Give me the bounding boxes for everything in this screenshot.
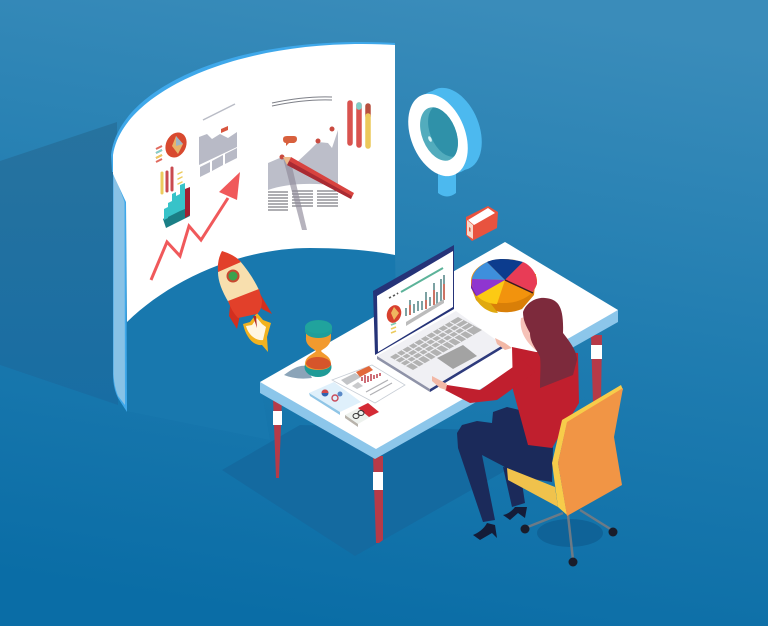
legs bbox=[457, 407, 553, 522]
back hand bbox=[495, 338, 512, 350]
tablet card bbox=[309, 382, 361, 415]
panel blue edge bbox=[111, 42, 395, 172]
panel shadow on floor bbox=[0, 122, 118, 405]
rocket collar bbox=[228, 289, 262, 318]
rocket bbox=[218, 251, 272, 352]
rocket body bbox=[218, 261, 259, 303]
desk edge bbox=[260, 310, 618, 459]
rocket window bbox=[226, 270, 240, 282]
fins bbox=[229, 306, 240, 329]
pencil bbox=[283, 157, 354, 230]
screen bars bbox=[406, 275, 444, 316]
book bbox=[466, 206, 498, 241]
desk top bbox=[260, 242, 618, 449]
laptop bbox=[373, 245, 503, 392]
hourglass bbox=[284, 320, 332, 379]
screen frame bbox=[373, 245, 454, 355]
desk floor shadow bbox=[222, 425, 510, 556]
growth arrow bbox=[151, 172, 240, 280]
panel sheet bbox=[113, 44, 395, 322]
small pie chart bbox=[156, 129, 191, 162]
keyboard bbox=[390, 317, 482, 370]
report sheet bbox=[332, 365, 405, 403]
flame bbox=[243, 313, 271, 352]
small area report bbox=[199, 104, 237, 177]
chair back edge bbox=[552, 385, 623, 515]
desk bbox=[260, 242, 618, 543]
area under panel bbox=[126, 248, 396, 440]
tall bars bbox=[350, 103, 368, 146]
front arm bbox=[445, 360, 535, 403]
woman bbox=[432, 298, 579, 540]
chair seat bbox=[507, 468, 558, 507]
large area chart bbox=[268, 97, 338, 210]
face bbox=[521, 315, 545, 352]
hair bbox=[523, 298, 577, 388]
curved presentation panel bbox=[111, 42, 395, 412]
calendar bbox=[345, 403, 379, 427]
screen heading bar bbox=[401, 268, 443, 292]
laptop base bbox=[377, 311, 503, 389]
small bars bbox=[162, 168, 182, 193]
legs bbox=[273, 335, 602, 543]
magnifying glass bbox=[408, 88, 482, 196]
pie chart 3D bbox=[471, 259, 537, 313]
chair base bbox=[520, 510, 618, 566]
chair back bbox=[558, 388, 623, 516]
teal 3D bar chart bbox=[163, 183, 190, 228]
shoes bbox=[473, 523, 497, 540]
screen pie bbox=[384, 303, 404, 325]
panel side strip bbox=[113, 170, 127, 412]
chair bbox=[507, 385, 623, 516]
rocket nose bbox=[218, 251, 241, 272]
torso bbox=[512, 347, 579, 448]
trackpad bbox=[437, 345, 477, 369]
back shin bbox=[503, 467, 525, 507]
front hand bbox=[432, 376, 447, 390]
